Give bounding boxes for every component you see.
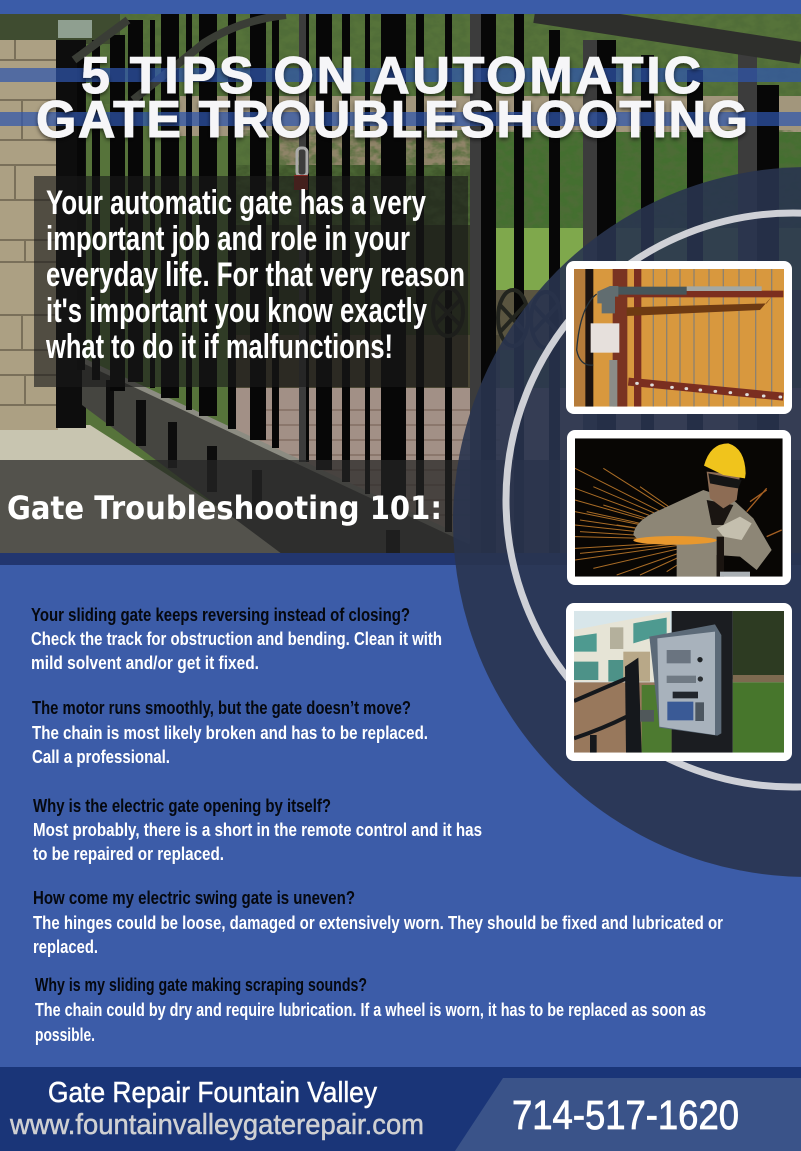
intro paragraph: Your automatic gate has a very: [46, 184, 426, 222]
title: 5 TIPS ON AUTOMATIC: [81, 47, 701, 105]
tip 2: The chain is most likely broken and has to be replaced.: [32, 723, 428, 743]
tip 2: The motor runs smoothly, but the gate doesn’t move?: [32, 698, 411, 718]
brick wall: [0, 40, 58, 430]
gate lower panel: [82, 360, 470, 560]
gate top rails: [74, 15, 286, 100]
company name: Gate Repair Fountain Valley: [48, 1077, 377, 1109]
dark strip: [0, 553, 801, 565]
title stripes: [0, 68, 801, 126]
large dark circle: [453, 167, 801, 877]
tip 2: Call a professional.: [32, 747, 170, 767]
footer: [0, 1067, 801, 1151]
tip 4: [33, 888, 723, 957]
white ring: [506, 213, 801, 787]
tip 5: possible.: [35, 1025, 95, 1045]
phone number: 714-517-1620: [512, 1092, 739, 1138]
tip 3: to be repaired or replaced.: [33, 844, 224, 864]
band behind subtitle: [0, 460, 801, 553]
tip 1: [31, 605, 442, 673]
tip 5: Why is my sliding gate making scraping sounds?: [35, 975, 367, 995]
intro paragraph: what to do it if malfunctions!: [45, 328, 393, 366]
photo card: gate actuator: [566, 261, 792, 414]
scrollwork baskets: [431, 286, 528, 342]
tip 3: Most probably, there is a short in the remote control and it has: [33, 820, 482, 840]
intro paragraph: [45, 184, 465, 366]
padlock: [294, 148, 308, 190]
tip 4: How come my electric swing gate is uneven?: [33, 888, 355, 908]
intro paragraph: important job and role in your: [46, 220, 410, 258]
tip 1: Check the track for obstruction and bending. Clean it with: [31, 629, 442, 649]
title: [36, 47, 748, 149]
tip 4: replaced.: [33, 937, 98, 957]
gate post: [56, 40, 86, 428]
photo card: gate intercom keypad: [566, 603, 792, 761]
pickets: [77, 14, 779, 554]
troubleshooting questions and answers: [31, 605, 723, 1045]
top blue band: [0, 0, 801, 14]
tip 5: [35, 975, 706, 1045]
title: GATE TROUBLESHOOTING: [36, 91, 748, 149]
photo card: worker grinding with sparks: [567, 430, 791, 585]
intro paragraph: it's important you know exactly: [46, 292, 427, 330]
website: www.fountainvalleygaterepair.com: [9, 1109, 424, 1141]
intro text panel: [34, 176, 468, 387]
concrete: [0, 425, 280, 553]
tip 1: Your sliding gate keeps reversing instead of closing?: [31, 605, 410, 625]
tip 3: Why is the electric gate opening by itself?: [33, 796, 331, 816]
intro paragraph: everyday life. For that very reason: [46, 256, 465, 294]
tip 2: [32, 698, 428, 767]
blue body panel: [0, 565, 801, 1067]
tip 1: mild solvent and/or get it fixed.: [31, 653, 259, 673]
worker: [633, 490, 772, 577]
phone panel: [455, 1078, 801, 1151]
tip 3: [33, 796, 482, 864]
subtitle: Gate Troubleshooting 101:: [7, 489, 442, 527]
photo: iron gate in front of hedge: [0, 12, 801, 560]
